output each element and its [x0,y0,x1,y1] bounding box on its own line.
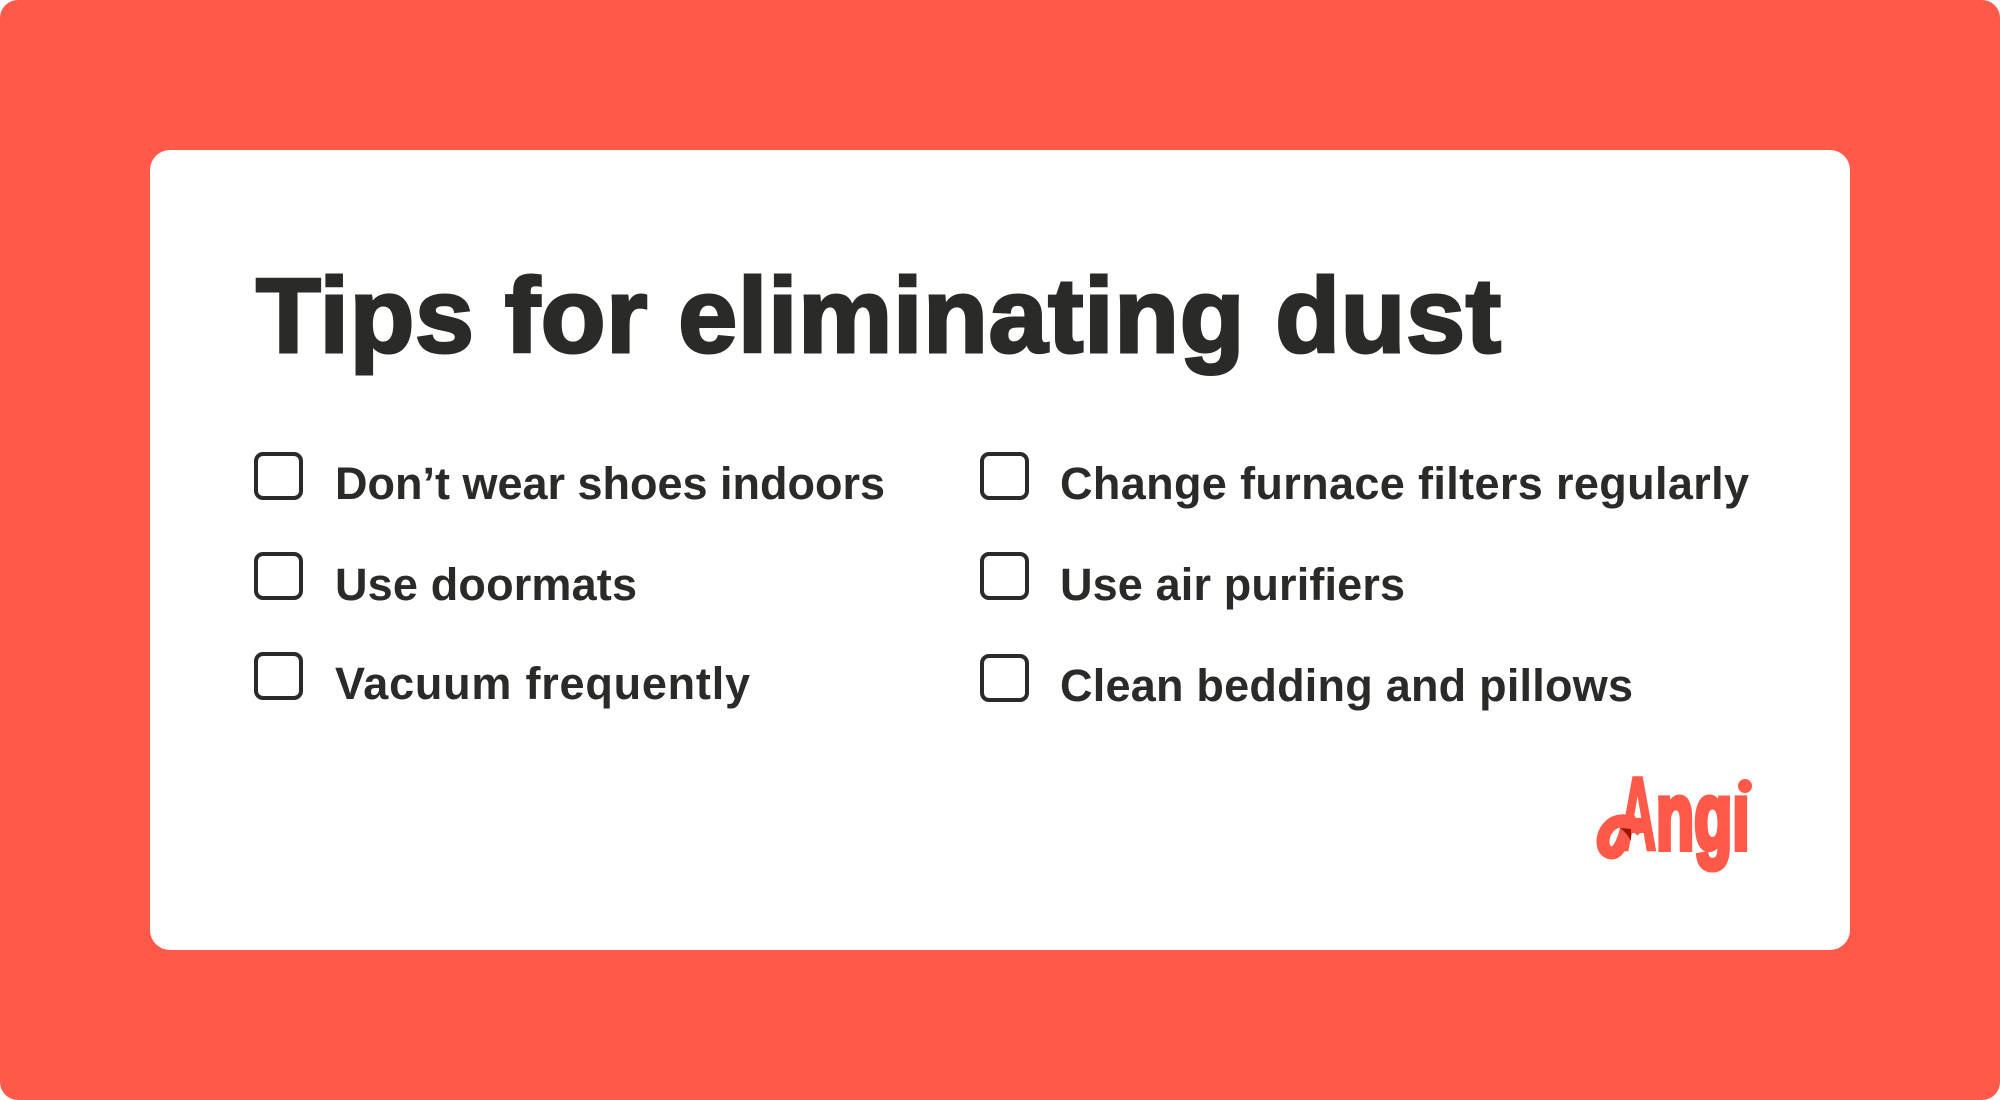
panel: white card [150,150,1850,950]
logo: Angi: A [1619,757,1656,872]
checklist item: Change furnace filters regularly: Change furnace filters regularly [1060,458,1749,509]
checklist item: Don't wear shoes indoors: Don’t wear shoes indoors [335,458,885,509]
title: Tips for eliminating dust [256,257,1501,375]
checklist item: Clean bedding and pillows: Clean bedding and pillows [1060,660,1633,711]
logo: Angi: ngi [1656,764,1750,870]
checklist item: Vacuum frequently: Vacuum frequently [335,658,750,709]
checklist item: Use doormats: Use doormats [335,559,637,610]
logo: Angi [1603,757,1760,872]
checklist item: Use air purifiers: Use air purifiers [1060,559,1405,610]
